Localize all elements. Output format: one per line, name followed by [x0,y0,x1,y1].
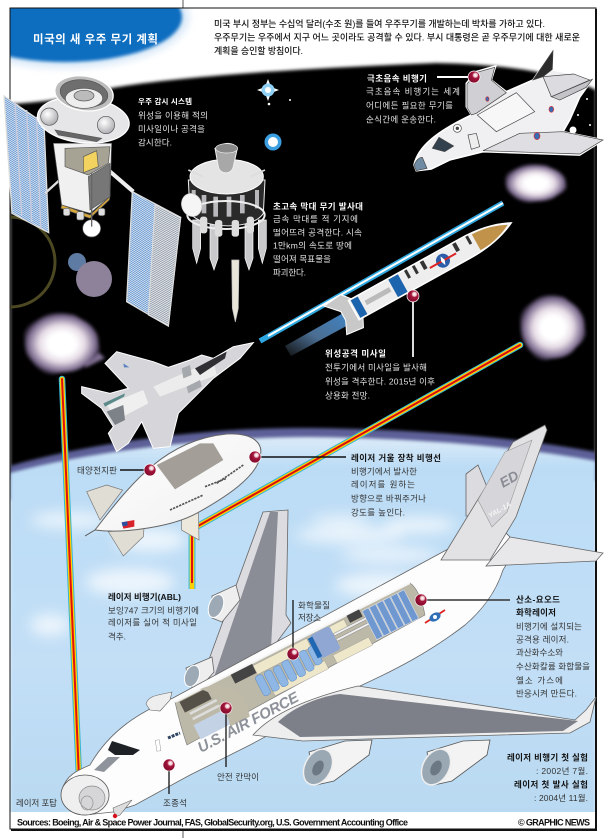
cream equipment [253,613,373,699]
near stabilizer [486,537,603,566]
cockpit windows [108,741,140,755]
spear [232,260,239,322]
label: test dates: : 2002년 7월. [536,766,588,776]
pin: chemical storage [287,600,299,660]
label: hypersonic plane: 극초음속 비행기 [367,74,427,84]
near wing [483,132,603,154]
airborne laser aircraft: YAL-1A [488,501,512,520]
label: anti-satellite missile: 상용화 전망. [325,390,370,400]
label: space surveillance system: 감시한다. [138,138,172,148]
forward pipes [189,699,220,720]
label: solar panel: 태양전지판 [77,466,117,476]
near engine outer [416,740,490,790]
label: test dates: 레이저 비행기 첫 실험 [507,752,588,762]
solar arm [97,160,133,192]
label: oxygen-iodine laser: 수산화칼륨 화합물을 [516,662,590,672]
label: airborne laser: 레이저 비행기(ABL) [108,592,181,602]
label: bulkhead: 안전 칸막이 [217,772,259,782]
hull [95,434,261,531]
top deck [190,159,263,194]
label: airborne laser [108,592,199,642]
label: laser mirror airship: 강도를 높인다. [351,508,405,518]
upper deck hump [146,692,172,711]
label: oxygen-iodine laser: 과산화수소와 [516,648,563,658]
laser cylinder [310,626,341,659]
laser beam: diagonal [198,345,520,526]
chemical tanks [254,645,325,697]
label: oxygen-iodine laser: 옐소 가스에 [516,676,563,686]
label: anti-satellite missile: 전투기에서 미사일을 발사해 [325,362,427,372]
title: 미국의 새 우주 무기 계획 [33,32,158,46]
label: test dates: 레이저 첫 발사 실험 [514,780,588,790]
explosion: right [520,295,586,360]
intro text: 계획을 승인할 방침이다. [214,45,303,56]
label: oxygen-iodine laser [516,594,590,698]
label: hypervelocity rod: 금속 막대를 적 기지에 [273,214,358,224]
far wing [467,67,506,115]
insignia [486,97,554,140]
solar panel window [157,443,223,489]
right solar panel [127,192,181,326]
ring [187,201,265,229]
top ring [53,72,115,115]
explosion: left [24,313,105,374]
outline [414,49,604,171]
airborne laser aircraft [61,425,603,818]
label: oxygen-iodine laser: 반응시켜 만든다. [516,688,577,698]
label: hypervelocity rod: 떨어져 목표물을 [273,254,331,264]
cutaway rim [175,583,410,702]
body [53,143,112,213]
pipes [333,615,375,641]
label: hypervelocity rod: 1만km의 속도로 땅에 [273,240,352,250]
fighter jet [82,343,253,452]
label: oxygen-iodine laser: 비행기에 설치되는 [516,622,582,632]
lens flares [0,217,112,307]
label: hypersonic plane [366,74,460,124]
label: chemical storage [298,600,330,622]
fins [533,51,553,80]
earth surface [10,437,596,815]
pin: cockpit [163,759,175,794]
laser mirror airship [85,434,261,556]
crop marks [182,0,184,838]
clouds [30,512,456,636]
laser beam: left vertical [62,379,79,778]
roundel [425,610,445,623]
anti-satellite missile [323,205,521,339]
label: anti-satellite missile: 위성을 격추한다. 2015년 이후 [325,376,435,386]
flag [122,520,134,529]
warhead [472,217,512,250]
fuselage [62,522,518,815]
label: hypervelocity rod: 떨어뜨려 공격한다. 시속 [273,228,362,238]
label: space surveillance system: 미사일이나 공격을 [138,124,205,134]
label: chemical storage: 화학물질 [298,600,330,610]
intro text [214,18,580,56]
outer space [10,63,596,480]
bulkhead [200,674,252,731]
stars [257,79,591,150]
label: oxygen-iodine laser: 산소-요오드 [516,594,560,604]
fuselage lettering: U.S. AIR FORCE [195,688,303,757]
label: hypersonic plane: 극초음속 비행기는 세계 [366,86,460,96]
label: laser mirror airship: 레이저를 원하는 [351,480,415,490]
cockpit [432,137,454,152]
label: hypersonic plane: 순식간에 운송한다. [366,114,436,124]
fin marks: ED [496,467,521,491]
nozzle [215,143,237,173]
intro text: 우주무기는 우주에서 지구 어느 곳이라도 공격할 수 있다. 부시 대통령은 곧 우주무기에 대한 새로운 [214,32,580,42]
nose cone [414,157,427,171]
pin: bulkhead [220,702,232,767]
label: laser mirror airship [351,453,441,518]
near wing [253,686,596,741]
crew door and windows [155,733,180,751]
rod launcher satellite [178,143,266,322]
label: hypervelocity rod [273,202,363,278]
laser module [362,590,419,640]
fins [323,290,369,339]
label: space surveillance system: 위성을 이용해 적의 [138,110,208,120]
pin: missile [407,290,419,357]
label: laser mirror airship: 방향으로 바꿔주거나 [351,494,426,504]
laser turret [61,775,109,815]
label: space surveillance system [138,96,208,148]
atmosphere band [10,428,596,500]
fins [87,485,123,520]
label: airborne laser: 보잉747 크기의 비행기에 [108,606,199,616]
forward compartment [179,688,212,713]
missile exhaust plume [285,312,352,356]
nose gear [113,800,132,817]
far engines [186,585,240,690]
left solar panel [4,96,49,233]
cutaway components [179,586,424,742]
label: chemical storage: 저장소 [298,612,321,622]
pin: oxygen-iodine laser [415,594,510,606]
main disc [35,93,131,147]
label: airborne laser: 격추. [108,632,126,642]
cyan beam [260,203,503,341]
tail fin [441,425,547,560]
cutaway interior [175,583,425,745]
laser beam: lower vertical [188,535,196,589]
label: hypervelocity rod: 초고속 막대 무기 발사대 [273,202,363,212]
label: cockpit: 조종석 [163,798,187,808]
label: laser mirror airship: 비행기에서 발사한 [351,466,417,476]
body [348,213,517,320]
far wing [200,510,291,684]
nose grey panel [94,757,120,772]
barrel [188,180,265,226]
label: test dates [507,752,588,803]
credit: © GRAPHIC NEWS [518,818,590,828]
label: hypervelocity rod: 파괴한다. [273,268,306,278]
hypersonic space plane [414,49,604,171]
label: anti-satellite missile: 위성공격 미사일 [325,348,386,358]
far stabilizer [466,465,487,516]
footer strip [10,812,595,817]
label: anti-satellite missile [325,348,435,400]
label: oxygen-iodine laser: 공격용 레이저. [516,634,569,644]
label: laser turret: 레이저 포탑 [16,798,57,808]
sources: Sources: Boeing, Air & Space Power Journal, FAS, GlobalSecurity.org, U.S. Government Accounting Office [17,818,408,828]
pin: solar panel [120,464,156,476]
blue title ellipse [10,8,184,65]
label: oxygen-iodine laser: 화학레이저 [516,608,556,618]
label: space surveillance system: 우주 감시 시스템 [138,96,192,106]
blue title glow [10,8,192,71]
rods [193,220,266,270]
hull windows [170,465,243,510]
dark upper bay [231,664,257,684]
near engine inner [298,740,372,790]
cargo bay [477,93,535,132]
label: laser mirror airship: 레이저 거울 장착 비행선 [351,453,441,463]
surveillance satellite [4,72,181,326]
pin: airship [249,451,346,463]
explosion: top [505,164,567,203]
label: test dates: : 2004년 11월. [534,793,588,803]
intro text: 미국 부시 정부는 수십억 달러(수조 원)를 들여 우주무기를 개발하는데 박차를 가하고 있다. [214,18,545,29]
pin: space plane [437,71,480,83]
label: hypersonic plane: 어디에든 필요한 무기를 [366,100,453,110]
label: airborne laser: 레이저를 실어 적 미사일 [108,618,197,628]
